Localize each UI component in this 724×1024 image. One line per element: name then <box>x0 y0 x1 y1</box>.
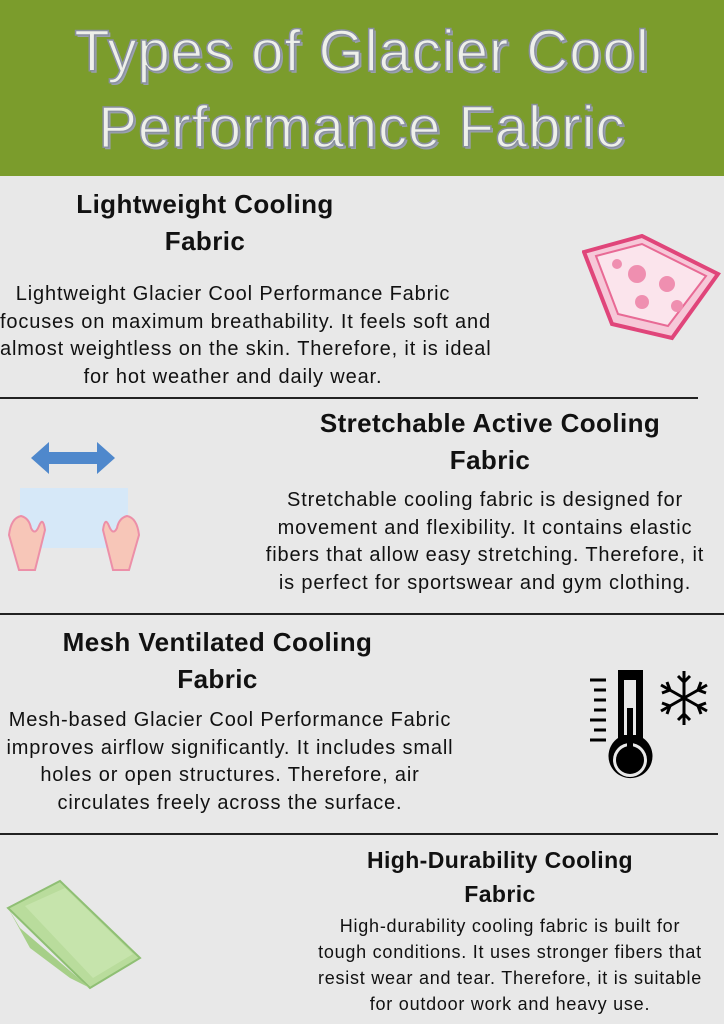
body text <box>0 283 492 388</box>
body text: holes or open structures. Therefore, air <box>40 764 420 786</box>
section: mesh <box>6 627 708 814</box>
heading: Fabric <box>177 664 258 694</box>
title <box>74 19 650 160</box>
section: high-durability <box>6 847 702 1014</box>
heading: Fabric <box>450 445 530 475</box>
body text: for hot weather and daily wear. <box>84 366 382 388</box>
heading <box>63 627 372 694</box>
body text <box>266 489 704 594</box>
title banner <box>0 0 724 176</box>
body text: Lightweight Glacier Cool Performance Fabric <box>16 283 450 305</box>
icon: pink scarf <box>582 234 721 340</box>
heading <box>320 408 660 475</box>
body text <box>6 709 453 814</box>
section: stretchable <box>8 408 704 594</box>
title: Types of Glacier Cool <box>74 19 650 84</box>
body text: almost weightless on the skin. Therefore, it is ideal <box>0 338 492 360</box>
heading: Stretchable Active Cooling <box>320 408 660 438</box>
icon: thermometer and snowflake <box>590 670 708 778</box>
section: lightweight <box>0 189 721 388</box>
heading: High-Durability Cooling <box>367 847 633 873</box>
body text: is perfect for sportswear and gym clothing. <box>279 572 691 594</box>
body text: fibers that allow easy stretching. Therefore, it <box>266 544 704 566</box>
body text: movement and flexibility. It contains elastic <box>278 516 692 538</box>
icon: stretch hands <box>8 442 140 571</box>
title: Performance Fabric <box>98 95 626 160</box>
heading: Mesh Ventilated Cooling <box>63 627 372 657</box>
body text: circulates freely across the surface. <box>58 792 402 814</box>
body text: Mesh-based Glacier Cool Performance Fabric <box>9 709 451 731</box>
body text: resist wear and tear. Therefore, it is suitable <box>318 968 702 988</box>
icon: green folded cloth <box>6 880 142 990</box>
body text: for outdoor work and heavy use. <box>370 994 650 1014</box>
body text: improves airflow significantly. It includes small <box>6 736 453 758</box>
heading: Lightweight Cooling <box>76 189 334 219</box>
body text: High-durability cooling fabric is built for <box>340 916 680 936</box>
body text: tough conditions. It uses stronger fibers that <box>318 942 702 962</box>
heading: Fabric <box>464 881 536 907</box>
heading: Fabric <box>165 226 245 256</box>
heading <box>367 847 633 907</box>
heading <box>76 189 334 256</box>
body text: Stretchable cooling fabric is designed for <box>287 489 683 511</box>
body text <box>318 916 702 1014</box>
body text: focuses on maximum breathability. It feels soft and <box>0 310 491 332</box>
